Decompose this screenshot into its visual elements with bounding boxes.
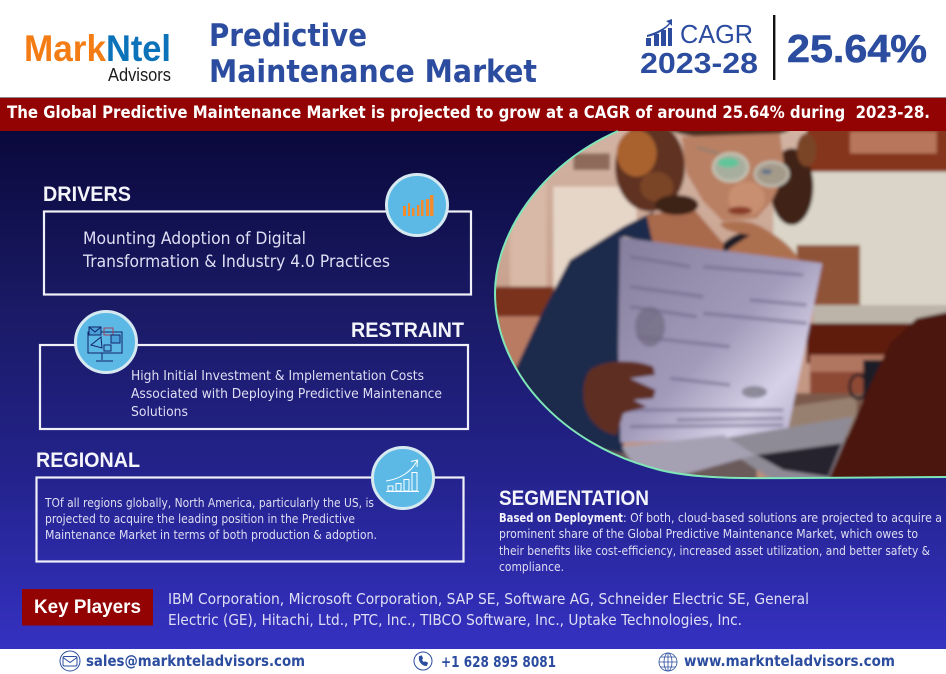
main gradient panel bbox=[0, 131, 946, 649]
key players list bbox=[168, 590, 809, 629]
website: www.marknteladvisors.com bbox=[684, 652, 895, 670]
document bbox=[618, 237, 822, 443]
icon: rising bars with arrow bbox=[646, 19, 672, 46]
regional text: TOf all regions globally, North America, particularly the US, is bbox=[44, 496, 374, 510]
room background bbox=[483, 123, 946, 490]
icon: email bbox=[60, 651, 80, 671]
glasses bbox=[697, 147, 788, 186]
regional text: Maintenance Market in terms of both production & adoption. bbox=[45, 528, 377, 542]
CAGR label: CAGR bbox=[680, 19, 753, 49]
logo: MarkNtel Advisors: Ntel bbox=[106, 28, 171, 69]
regional text bbox=[44, 496, 377, 542]
mouth bbox=[728, 207, 752, 215]
icon: phone bbox=[414, 652, 432, 670]
drivers box bbox=[44, 212, 471, 294]
icon: orange bar chart bbox=[386, 174, 448, 236]
restraint text: High Initial Investment & Implementation Costs bbox=[131, 368, 424, 384]
restraint text bbox=[131, 368, 442, 420]
key players list: IBM Corporation, Microsoft Corporation, SAP SE, Software AG, Schneider Electric SE, General bbox=[168, 590, 809, 608]
sweater bbox=[513, 212, 653, 453]
icon: monitor with media bbox=[76, 312, 136, 372]
CAGR period: 2023-28 bbox=[640, 48, 758, 80]
regional box bbox=[36, 478, 464, 562]
title bbox=[209, 18, 537, 90]
logo: MarkNtel Advisors: Advisors bbox=[108, 65, 171, 85]
header divider bbox=[773, 15, 775, 80]
key players list: Electric (GE), Hitachi, Ltd., PTC, Inc., TIBCO Software, Inc., Uptake Technologies, Inc. bbox=[168, 611, 742, 629]
footer bbox=[0, 649, 946, 674]
key players badge bbox=[22, 589, 153, 626]
laptop and papers bbox=[728, 416, 854, 478]
regional heading: REGIONAL bbox=[36, 449, 140, 472]
red banner bbox=[0, 97, 946, 131]
icon: growth chart bbox=[372, 448, 434, 508]
left hand bbox=[583, 361, 656, 435]
white header background bbox=[0, 0, 946, 98]
photo: woman reading a document bbox=[483, 118, 946, 490]
phone number: +1 628 895 8081 bbox=[441, 653, 556, 671]
panel: segmentation bbox=[499, 487, 942, 574]
segmentation text: Based on Deployment bbox=[499, 511, 623, 525]
hair bbox=[615, 118, 817, 225]
thumb and chin hand bbox=[723, 232, 753, 255]
laptop back bbox=[827, 312, 946, 483]
panel: drivers bbox=[43, 174, 471, 294]
panel: restraint bbox=[40, 312, 468, 429]
neck and chest bbox=[644, 208, 726, 252]
title: Maintenance Market bbox=[209, 54, 537, 90]
drivers text: Transformation & Industry 4.0 Practices bbox=[82, 252, 390, 272]
email address: sales@marknteladvisors.com bbox=[86, 652, 305, 670]
icon: globe bbox=[659, 653, 677, 671]
restraint text: Solutions bbox=[131, 404, 188, 420]
title: Predictive bbox=[209, 18, 367, 54]
restraint text: Associated with Deploying Predictive Maintenance bbox=[131, 386, 442, 402]
drivers text: Mounting Adoption of Digital bbox=[83, 229, 306, 249]
segmentation heading: SEGMENTATION bbox=[499, 487, 649, 510]
mug bbox=[850, 360, 890, 400]
logo: MarkNtel Advisors bbox=[24, 28, 171, 85]
panel: regional bbox=[36, 448, 464, 562]
CAGR value: 25.64% bbox=[787, 28, 927, 71]
drivers text bbox=[82, 229, 390, 272]
logo: MarkNtel Advisors: Mark bbox=[24, 28, 106, 69]
drivers heading: DRIVERS bbox=[43, 183, 131, 206]
restraint heading: RESTRAINT bbox=[351, 319, 464, 342]
segmentation text bbox=[499, 511, 942, 574]
restraint box bbox=[40, 345, 468, 429]
segmentation text: compliance. bbox=[499, 560, 564, 574]
regional text: projected to acquire the leading position in the Predictive bbox=[45, 512, 355, 526]
key players badge: Key Players bbox=[34, 596, 141, 618]
face bbox=[682, 133, 785, 222]
